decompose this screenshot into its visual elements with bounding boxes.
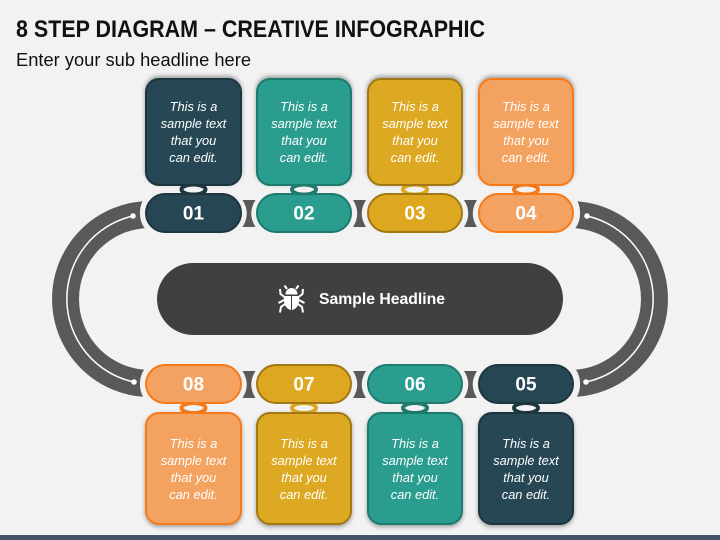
step 05: sample text (493, 453, 559, 468)
step 08: sample text (161, 453, 227, 468)
step 06: that you (392, 470, 438, 485)
hourglass connectors (242, 200, 477, 398)
step 02: This is a (280, 99, 328, 114)
step 01 (146, 79, 241, 232)
step 06: sample text (382, 453, 448, 468)
step 01: that you (171, 133, 216, 148)
step 05 (479, 365, 573, 524)
step 03 (368, 79, 462, 232)
step 01: This is a (170, 99, 217, 114)
step 06: This is a (391, 436, 439, 451)
step 06: 06 (404, 374, 426, 396)
step 07: This is a (280, 436, 328, 451)
step 05: that you (503, 470, 549, 485)
step 04: that you (503, 133, 549, 148)
step 04: sample text (493, 116, 559, 131)
step 02: that you (281, 133, 327, 148)
step 08 (146, 365, 241, 524)
center panel (157, 263, 563, 335)
step 01: can edit. (169, 150, 218, 165)
step 04: 04 (515, 204, 537, 224)
step 02 (257, 79, 351, 232)
step 05: can edit. (502, 487, 550, 502)
subtitle: Enter your sub headline here (16, 50, 251, 70)
step 03: can edit. (391, 150, 439, 165)
step 08: can edit. (169, 487, 218, 502)
step 06 (368, 365, 462, 524)
step 05: This is a (502, 436, 550, 451)
step 03: sample text (382, 116, 448, 131)
left arc (52, 201, 150, 397)
step 08: 08 (183, 374, 204, 396)
step 07: that you (281, 470, 327, 485)
step 03: This is a (391, 99, 439, 114)
right arc (570, 201, 668, 397)
icon: bug (278, 286, 304, 312)
step 07 (257, 365, 351, 524)
step 05: 05 (515, 374, 537, 396)
step 04: can edit. (502, 150, 550, 165)
pill halos (140, 188, 580, 409)
step 03: that you (392, 133, 438, 148)
step 08: that you (171, 470, 216, 485)
step 07: sample text (271, 453, 337, 468)
step 01: sample text (161, 116, 227, 131)
step 06: can edit. (391, 487, 439, 502)
step 04: This is a (502, 99, 550, 114)
step 03: 03 (404, 204, 426, 224)
center headline: Sample Headline (319, 291, 445, 308)
step 07: can edit. (280, 487, 328, 502)
step 04 (479, 79, 573, 232)
step 02: 02 (293, 204, 315, 224)
step 07: 07 (293, 374, 315, 396)
title: 8 STEP DIAGRAM – CREATIVE INFOGRAPHIC (16, 16, 485, 43)
step 01: 01 (183, 204, 204, 224)
step 02: can edit. (280, 150, 328, 165)
step 08: This is a (170, 436, 217, 451)
footer bar (0, 535, 720, 540)
step 02: sample text (271, 116, 337, 131)
